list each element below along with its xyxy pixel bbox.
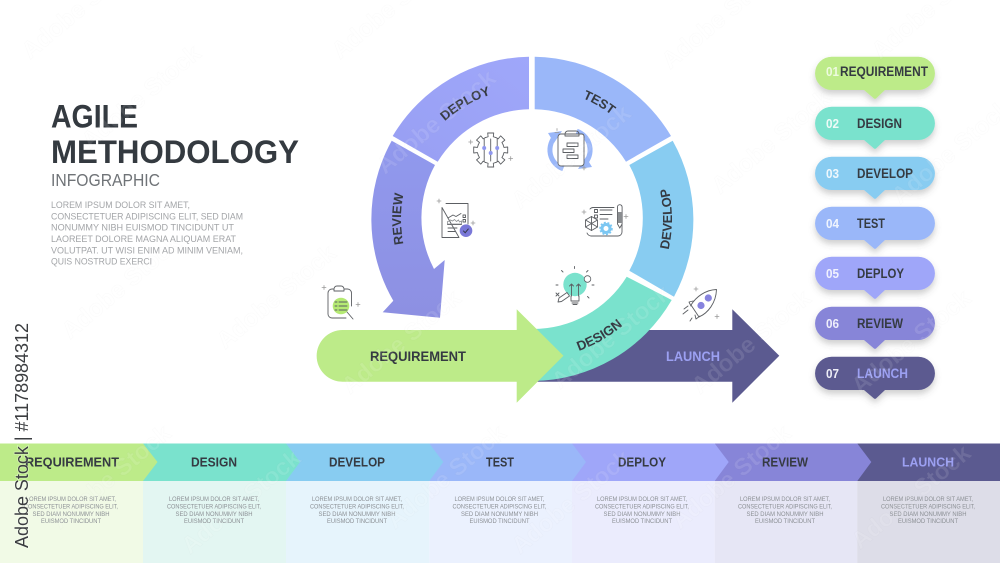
text: Adobe Stock — [707, 84, 837, 200]
column text: develop — [310, 497, 404, 525]
arrow: requirement: REQUIREMENT — [370, 348, 466, 364]
legend pills — [815, 57, 935, 399]
text: Adobe Stock — [177, 444, 307, 560]
pill 06 review: REVIEW — [857, 316, 903, 331]
column text: launch — [881, 497, 975, 525]
pill 03 develop: DEVELOP — [857, 166, 913, 181]
pill 05 deploy: 05 — [826, 267, 839, 281]
text: Adobe Stock — [372, 64, 502, 180]
column text: deploy: CONSECTETUER ADIPISCING ELIT, — [595, 504, 689, 510]
column text: develop: CONSECTETUER ADIPISCING ELIT, — [310, 504, 404, 510]
icon: design light bulb — [556, 266, 594, 304]
title: AGILE — [51, 98, 138, 134]
text: Adobe Stock — [57, 229, 187, 345]
ring segment: deploy: DEPLOY — [440, 86, 488, 121]
icon: deploy gear with sliders — [469, 133, 513, 167]
pill 05 deploy: DEPLOY — [857, 266, 904, 281]
column text: test: LOREM IPSUM DOLOR SIT AMET, — [454, 497, 545, 503]
chevron 3 develop — [286, 444, 443, 481]
column text: deploy — [595, 497, 689, 525]
column text: develop: SED DIAM NONUMMY NIBH — [318, 512, 396, 518]
column text: design: EUISMOD TINCIDUNT — [184, 519, 244, 525]
column text: requirement: CONSECTETUER ADIPISCING ELIT, — [24, 504, 118, 510]
chevron 7 launch: LAUNCH — [902, 455, 954, 470]
ring segment: test — [534, 56, 671, 162]
chevron 5 deploy: DEPLOY — [618, 455, 666, 470]
ring segment: develop — [629, 140, 694, 297]
column text: design — [167, 497, 261, 525]
arrow: requirement — [317, 309, 564, 403]
intro text block: LAOREET DOLORE MAGNA ALIQUAM ERAT — [51, 233, 236, 244]
icon: requirement clipboard — [322, 286, 360, 319]
chevron 4 test — [429, 444, 586, 481]
column text: deploy: SED DIAM NONUMMY NIBH — [604, 512, 680, 518]
pill 06 review: 06 — [826, 317, 839, 331]
intro text block — [51, 199, 243, 267]
text: Adobe Stock — [47, 419, 177, 535]
ring segment: design: DESIGN — [576, 319, 622, 351]
intro text block: NONUMMY NIBH EUISMOD TINCIDUNT UT — [51, 222, 234, 233]
pill 04 test: TEST — [857, 216, 886, 231]
column backgrounds — [0, 481, 1000, 563]
text: Adobe Stock — [382, 419, 512, 535]
column text: requirement: LOREM IPSUM DOLOR SIT AMET, — [26, 497, 116, 503]
column text: requirement: EUISMOD TINCIDUNT — [41, 519, 101, 525]
text: Adobe Stock — [847, 439, 977, 555]
icon: develop blueprint — [582, 205, 628, 236]
pill 01 requirement: 01 — [826, 65, 839, 79]
column text: test: CONSECTETUER ADIPISCING ELIT, — [452, 504, 547, 510]
text: Adobe Stock — [77, 39, 207, 155]
pill 02 design — [815, 107, 935, 149]
bottom timeline — [0, 444, 1000, 563]
column text: test: EUISMOD TINCIDUNT — [470, 519, 530, 525]
column text: launch: CONSECTETUER ADIPISCING ELIT, — [881, 504, 975, 510]
chevron 5 deploy — [572, 444, 729, 481]
pill 01 requirement: REQUIREMENT — [840, 64, 929, 79]
column text: requirement: SED DIAM NONUMMY NIBH — [32, 512, 110, 518]
text: Adobe Stock — [847, 284, 977, 400]
intro text block: VOLUTPAT. UT WISI ENIM AD MINIM VENIAM, — [51, 244, 243, 255]
pill 04 test: 04 — [826, 217, 839, 231]
column text: test — [452, 497, 547, 525]
column text: design: LOREM IPSUM DOLOR SIT AMET, — [169, 497, 259, 503]
column text: review: LOREM IPSUM DOLOR SIT AMET, — [740, 497, 830, 503]
ring segment: review arrow: REVIEW — [392, 192, 404, 245]
pill 02 design: DESIGN — [857, 116, 902, 131]
pill 03 develop — [815, 157, 935, 199]
column text: launch: EUISMOD TINCIDUNT — [898, 519, 958, 525]
pill 07 launch: 07 — [826, 367, 839, 381]
ring segment: test: TEST — [585, 90, 616, 113]
column text: deploy: EUISMOD TINCIDUNT — [612, 519, 672, 525]
icon: test clipboard with cycle arrows — [548, 128, 592, 170]
text: Adobe Stock — [337, 284, 467, 400]
chevron 1 requirement — [0, 444, 158, 481]
intro text block: LOREM IPSUM DOLOR SIT AMET, — [51, 199, 190, 210]
column text: develop: EUISMOD TINCIDUNT — [327, 519, 387, 525]
arrow: launch: LAUNCH — [666, 348, 720, 364]
text: Adobe Stock — [507, 99, 637, 215]
chevron 4 test: TEST — [486, 455, 514, 470]
text: Adobe Stock — [212, 239, 342, 355]
title: METHODOLOGY — [51, 134, 299, 170]
ring segment: review arrow — [371, 140, 445, 318]
text: Adobe Stock — [667, 419, 797, 535]
title: INFOGRAPHIC — [51, 170, 160, 190]
pill 03 develop: 03 — [826, 167, 839, 181]
ring segment: deploy — [392, 56, 529, 162]
intro text block: QUIS NOSTRUD EXERCI — [51, 256, 152, 267]
icon: review report — [437, 199, 475, 238]
column text: test: SED DIAM NONUMMY NIBH — [461, 512, 538, 518]
column text: launch: LOREM IPSUM DOLOR SIT AMET, — [883, 497, 973, 503]
text: Adobe Stock — [687, 284, 817, 400]
chevron 6 review: REVIEW — [762, 455, 809, 470]
pill 05 deploy — [815, 257, 935, 299]
pill 02 design: 02 — [826, 117, 839, 131]
pill 07 launch — [815, 357, 935, 399]
chevron 6 review — [715, 444, 871, 481]
pill 06 review — [815, 307, 935, 349]
icon: launch rocket — [683, 287, 719, 321]
column text: develop: LOREM IPSUM DOLOR SIT AMET, — [312, 497, 402, 503]
pill 04 test — [815, 207, 935, 249]
chevron 7 launch — [857, 444, 1000, 481]
ring segment: design — [536, 276, 672, 381]
stock id side text: Adobe Stock | #1178984312 — [12, 323, 32, 548]
title — [51, 98, 299, 190]
ring segment: develop: DEVELOP — [660, 190, 672, 249]
column text: review — [738, 497, 832, 525]
pill 01 requirement — [815, 57, 935, 99]
chevron 2 design — [143, 444, 300, 481]
chevron 2 design: DESIGN — [191, 455, 237, 470]
column text: design: SED DIAM NONUMMY NIBH — [176, 512, 252, 518]
pill 07 launch: LAUNCH — [857, 366, 908, 381]
column text: review: SED DIAM NONUMMY NIBH — [746, 512, 824, 518]
chevron 1 requirement: REQUIREMENT — [25, 455, 119, 470]
column text: launch: SED DIAM NONUMMY NIBH — [890, 512, 966, 518]
column text: review: EUISMOD TINCIDUNT — [755, 519, 815, 525]
intro text block: CONSECTETUER ADIPISCING ELIT, SED DIAM — [51, 210, 243, 221]
column text: deploy: LOREM IPSUM DOLOR SIT AMET, — [597, 497, 687, 503]
text: Adobe Stock — [507, 444, 637, 560]
text: Adobe Stock — [547, 279, 677, 395]
arrow: launch — [530, 309, 779, 403]
column text: requirement — [24, 497, 118, 525]
chevron 3 develop: DEVELOP — [329, 455, 385, 470]
column text: design: CONSECTETUER ADIPISCING ELIT, — [167, 504, 261, 510]
column text: review: CONSECTETUER ADIPISCING ELIT, — [738, 504, 832, 510]
